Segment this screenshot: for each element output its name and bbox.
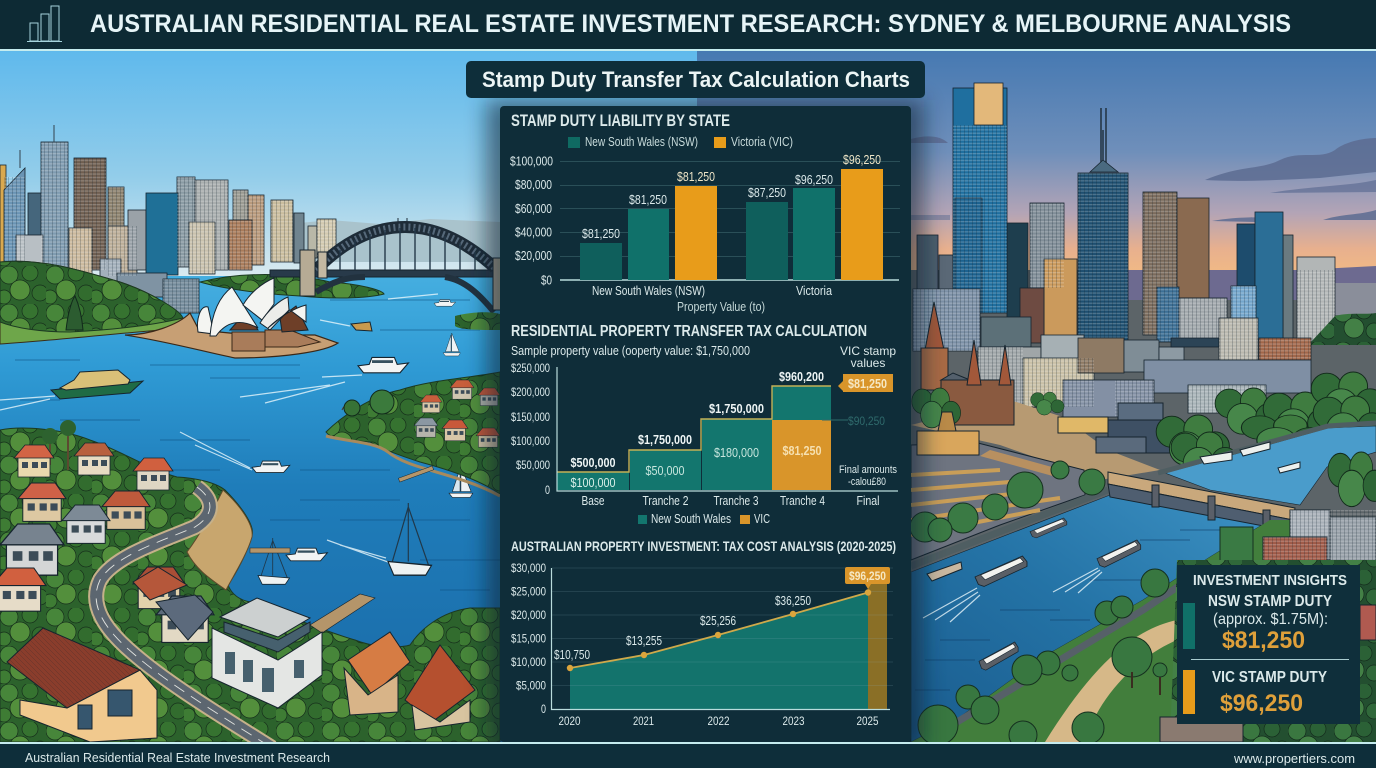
bridge: Sydney Harbour Bridge (270, 218, 501, 312)
background scene: Melbourne skyline and Yarra river (697, 51, 1376, 749)
riverside office blocks (1220, 527, 1253, 561)
x axis labels: Tranche 2 (642, 494, 689, 508)
heading: RESIDENTIAL PROPERTY TRANSFER TAX CALCULATION (511, 323, 867, 340)
value labels: $96,250 (795, 173, 833, 187)
x axis labels: 2023 (782, 714, 805, 728)
NSW stat: $81,250 (1222, 627, 1305, 654)
step labels: $100,000 (570, 476, 616, 490)
y axis labels: 0 (541, 702, 546, 716)
x axis labels (582, 494, 880, 508)
footer left text: Australian Residential Real Estate Investment Research (25, 750, 330, 765)
clouds (911, 136, 1376, 222)
x axis labels: Tranche 4 (780, 494, 825, 508)
VIC note (840, 344, 896, 370)
icon: bar chart logo (27, 6, 62, 42)
river: Yarra main (911, 495, 1270, 742)
VIC note: values (851, 356, 885, 370)
footer bar (0, 742, 1376, 768)
ground under city (911, 270, 1376, 742)
VIC stat: VIC STAMP DUTY (1212, 669, 1328, 686)
value labels (582, 153, 881, 241)
callout: 2025 value: $96,250 (849, 569, 886, 583)
chart: stamp duty liability by state (510, 112, 900, 314)
point labels (554, 594, 811, 662)
panel: investment insights (1177, 565, 1360, 724)
NSW stat: (approx. $1.75M): (1213, 611, 1328, 628)
footer right text: www.propertiers.com (1233, 751, 1355, 766)
river: Yarra upper reach (1165, 426, 1376, 505)
VIC stat: $96,250 (1220, 690, 1303, 717)
y axis labels: 0 (545, 483, 550, 497)
skyline: Sydney CBD towers (0, 125, 336, 313)
legend: Victoria (VIC) (731, 135, 793, 149)
value labels: $81,250 (677, 170, 715, 184)
sample note: Sample property value (ooperty value: $1,750,000 (511, 344, 750, 358)
x axis labels: Property Value (to) (677, 300, 765, 314)
faded annotation (822, 414, 885, 428)
value labels: $81,250 (629, 193, 667, 207)
subtitle pill: Stamp Duty Transfer Tax Calculation Charts (482, 67, 910, 92)
axes (552, 568, 890, 710)
legend: New South Wales (NSW) (585, 135, 698, 149)
water: Sydney Harbour (0, 276, 697, 742)
bars (580, 169, 883, 280)
final amounts note: Final amounts (839, 464, 897, 476)
point labels: $13,255 (626, 634, 662, 648)
y axis labels: $20,000 (515, 249, 552, 263)
NSW stat: NSW STAMP DUTY (1208, 593, 1333, 610)
step labels: $1,750,000 (638, 433, 692, 447)
heading: AUSTRALIAN PROPERTY INVESTMENT: TAX COST ANALYSIS (2020-2025) (511, 538, 896, 554)
hillside houses (348, 632, 410, 695)
winding road (96, 487, 272, 748)
x axis labels: Victoria (796, 284, 832, 298)
point labels: $10,750 (554, 648, 590, 662)
distant suburbs (1335, 283, 1376, 315)
trees behind towers (1311, 313, 1376, 345)
foreground land (0, 420, 500, 748)
palm trees (50, 432, 68, 470)
legend: VIC (754, 512, 770, 526)
sandstone cliff (187, 490, 252, 590)
header bar (0, 0, 1376, 51)
right shore with houses (326, 312, 500, 496)
background scene: Sydney harbour (0, 51, 697, 748)
x axis labels: 2021 (633, 714, 654, 728)
callout: VIC stamp value (838, 374, 893, 392)
step labels: $1,750,000 (709, 402, 764, 416)
legend: New South Wales (651, 512, 731, 526)
x axis labels: 2020 (558, 714, 581, 728)
x axis labels (558, 714, 879, 728)
x axis labels: New South Wales (NSW) (592, 284, 705, 298)
y axis labels: $0 (541, 274, 552, 288)
river boats (923, 442, 1300, 670)
value labels: $96,250 (843, 153, 881, 167)
y axis labels: $60,000 (515, 202, 552, 216)
modern white apartment (212, 598, 322, 708)
peninsula: Botanic Gardens (0, 261, 185, 344)
callout: VIC stamp value: $81,250 (848, 377, 887, 391)
point labels: $25,256 (700, 614, 736, 628)
park and riverside (911, 452, 1376, 749)
tree clusters: upper right (912, 372, 1376, 478)
Sydney boats and ferries (0, 294, 473, 584)
step labels: $500,000 (570, 456, 616, 470)
y axis labels: $5,000 (516, 678, 546, 692)
gridlines and axes (552, 568, 893, 686)
distant hills (270, 219, 500, 262)
heading: INVESTMENT INSIGHTS (1193, 572, 1347, 589)
y axis labels (511, 561, 546, 716)
window texture (913, 125, 1335, 351)
y axis labels: $200,000 (511, 385, 550, 399)
x axis labels (592, 284, 832, 314)
y axis labels: $80,000 (515, 178, 552, 192)
panel: charts column (500, 106, 911, 742)
y axis labels: $15,000 (511, 632, 546, 646)
y axis labels: $100,000 (510, 154, 553, 168)
window texture (4, 142, 336, 313)
x axis labels: Tranche 3 (714, 494, 759, 508)
heading: STAMP DUTY LIABILITY BY STATE (511, 112, 730, 130)
stepped bars (557, 367, 898, 491)
red house mid hill (133, 567, 187, 600)
far shore strip (200, 274, 384, 298)
final amounts note: -calou£80 (848, 476, 886, 488)
y axis labels: $25,000 (511, 584, 546, 598)
ground plaza (911, 400, 1160, 480)
x axis labels: 2025 (856, 714, 879, 728)
callout: 2025 value (845, 567, 890, 589)
chart: tax cost analysis (511, 538, 896, 728)
step labels: $50,000 (646, 464, 685, 478)
y axis labels: $150,000 (511, 410, 550, 424)
right bank quay (1158, 423, 1376, 473)
river ripples (915, 530, 1230, 690)
Opera House (125, 278, 338, 358)
water ripples (15, 300, 500, 590)
y axis labels (511, 361, 550, 497)
x axis labels: Base (582, 494, 605, 508)
large tile-roof house (7, 628, 157, 742)
legend (568, 135, 793, 149)
grey roof house (156, 595, 213, 640)
suburban houses (14, 445, 54, 477)
final amounts note (839, 464, 897, 488)
y axis labels: $50,000 (516, 458, 550, 472)
VIC note: VIC stamp (840, 344, 896, 358)
y axis labels: $250,000 (511, 361, 550, 375)
step labels (570, 370, 824, 490)
y axis labels: $10,000 (511, 655, 546, 669)
title: AUSTRALIAN RESIDENTIAL REAL ESTATE INVESTMENT RESEARCH: SYDNEY & MELBOURNE ANALYSIS (90, 10, 1291, 38)
point labels: $36,250 (775, 594, 811, 608)
dark arts building (1058, 403, 1176, 453)
panel shadow (486, 100, 924, 750)
chart: residential property transfer tax calculation (511, 323, 898, 526)
distant hills (1120, 266, 1376, 300)
NSW stat (1183, 593, 1333, 654)
x axis labels: Final (856, 494, 880, 508)
low-rise city blocks (978, 317, 1311, 417)
flinders station (911, 412, 1085, 560)
faded annotation: $90,250 (848, 414, 885, 428)
step labels: $960,200 (779, 370, 824, 384)
y axis labels (510, 154, 553, 288)
step labels: $81,250 (782, 444, 822, 458)
bridge: Princes Bridge (1108, 472, 1295, 530)
cathedral spires (921, 302, 1014, 425)
y axis labels: $30,000 (511, 561, 546, 575)
y axis labels: $100,000 (511, 434, 550, 448)
Melbourne towers (913, 83, 1335, 351)
pier (250, 548, 290, 553)
step labels: $180,000 (714, 446, 759, 460)
line series (567, 589, 871, 671)
block windows (978, 318, 1311, 417)
y axis labels: $40,000 (515, 226, 552, 240)
left bank trees (910, 461, 1108, 566)
value labels: $87,250 (748, 186, 786, 200)
subtitle pill (466, 61, 925, 98)
x axis labels: 2022 (708, 714, 730, 728)
y axis labels: $20,000 (511, 608, 546, 622)
VIC stat (1183, 669, 1328, 717)
gridlines and axis (560, 162, 900, 280)
area fill (570, 584, 887, 709)
value labels: $81,250 (582, 227, 620, 241)
